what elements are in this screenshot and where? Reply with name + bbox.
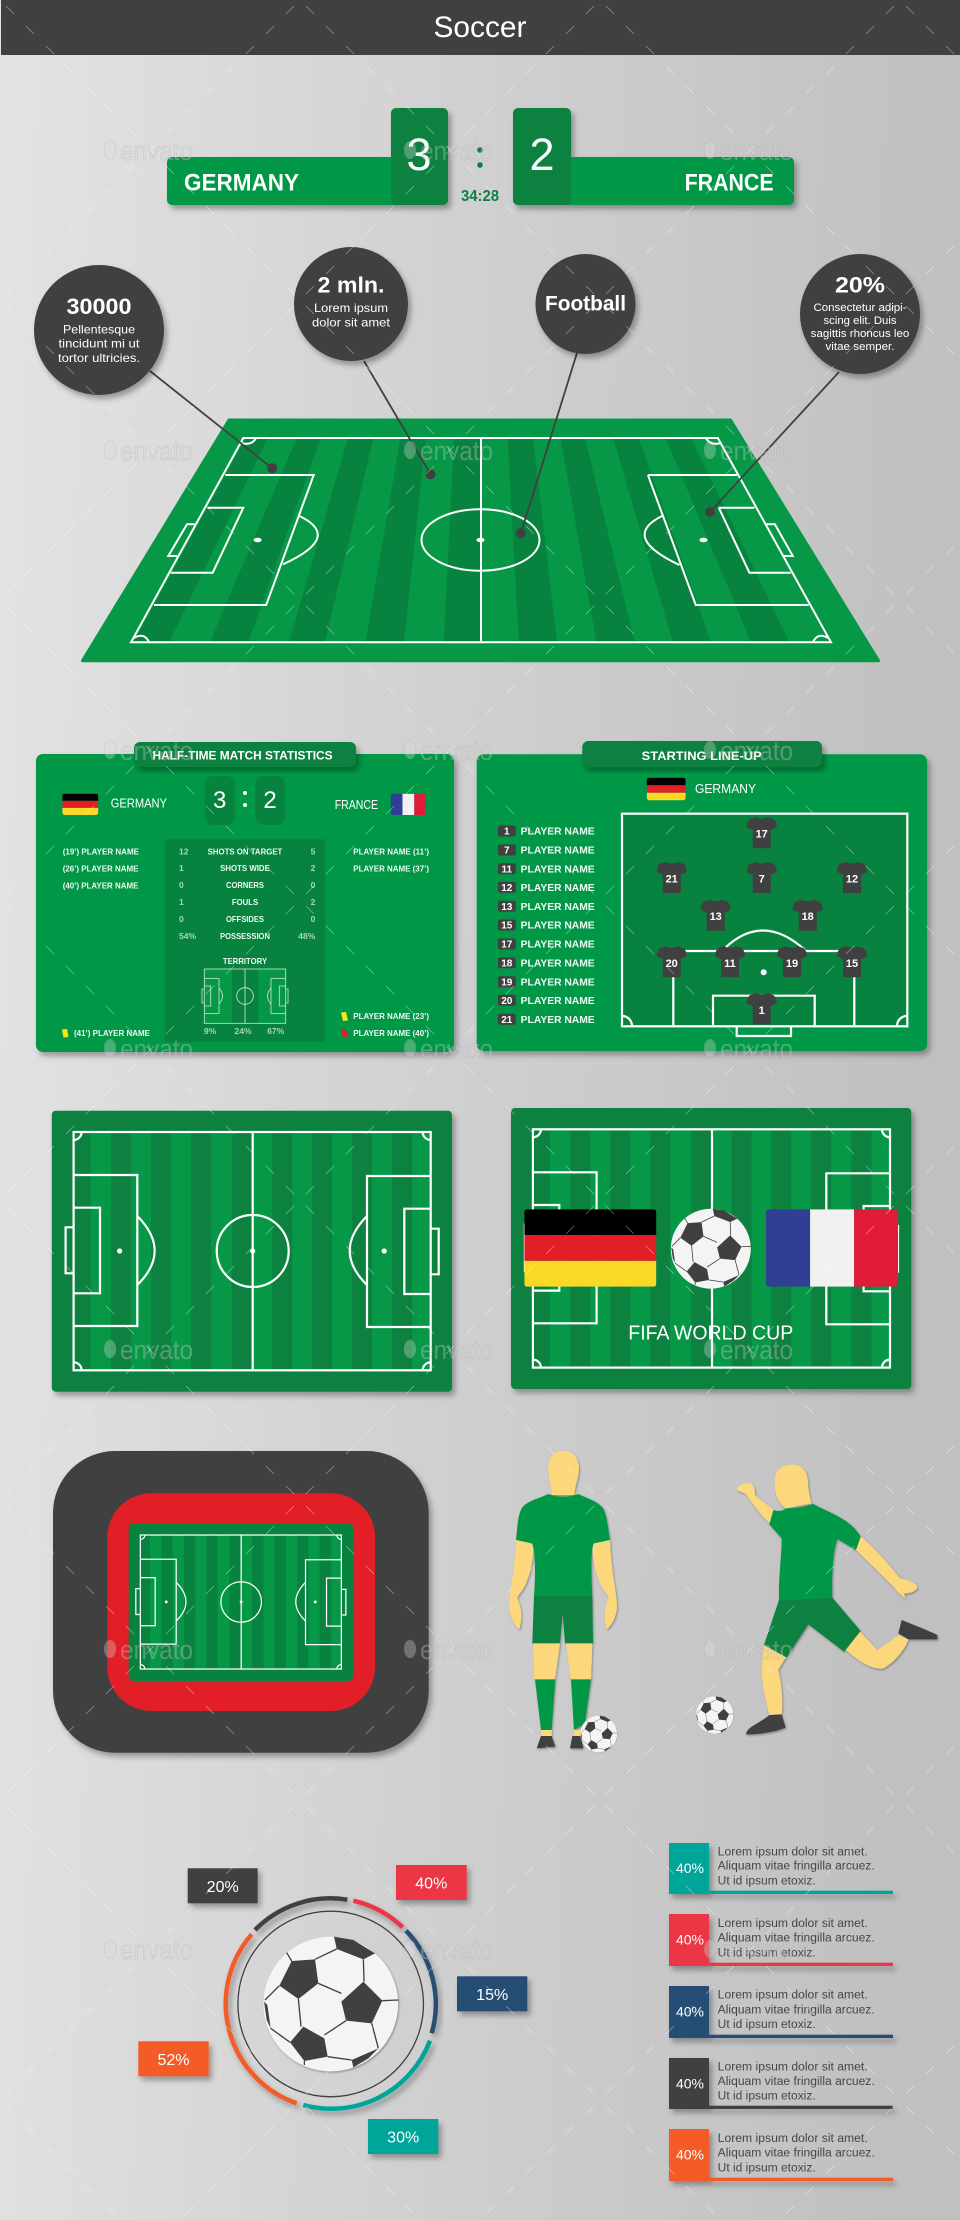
watermarks: envato: [420, 1935, 493, 1965]
watermarks: envato: [720, 1034, 793, 1064]
ring segment: orange: [226, 1934, 297, 2103]
France goal scorers: PLAYER NAME (11’): [353, 846, 429, 856]
yellow card: France: [341, 1012, 348, 1021]
ring segment: blue: [406, 1931, 436, 2033]
player list: PLAYER NAME: [521, 902, 595, 913]
list row: teal: [669, 1843, 893, 1894]
list row: dark: 40%: [676, 2075, 704, 2091]
player list: 12: [501, 883, 513, 894]
statistics table: 1: [179, 897, 184, 907]
red card: France: [341, 1029, 348, 1038]
panel tab: [134, 742, 356, 767]
list row: red: 40%: [676, 1931, 704, 1947]
score colon: [477, 147, 483, 168]
player list: PLAYER NAME: [521, 996, 595, 1007]
list row: dark: Ut id ipsum etoxiz.: [718, 2091, 816, 2103]
territory percentages: 24%: [234, 1026, 252, 1036]
football: [263, 1937, 398, 2071]
panel heading: HALF-TIME MATCH STATISTICS: [152, 748, 332, 762]
player shirts: 15: [846, 958, 858, 970]
panel: starting line-up: [477, 741, 927, 1051]
list row: orange: Lorem ipsum dolor sit amet.: [718, 2133, 868, 2145]
panel: France score bar: [513, 108, 794, 205]
list row: blue: 40%: [676, 2003, 704, 2019]
watermarks: envato: [720, 1335, 793, 1365]
list row: orange: [669, 2129, 893, 2181]
list row: orange: 40%: [676, 2146, 704, 2162]
player list: PLAYER NAME: [521, 883, 595, 894]
callout: 30000: Pellentesque: [63, 322, 135, 336]
watermarks: envato: [120, 136, 193, 166]
watermarks: envato: [120, 1935, 193, 1965]
player list: PLAYER NAME: [521, 921, 595, 932]
callout: 30000: tincidunt mi ut: [58, 336, 140, 350]
label: 20%: [188, 1868, 258, 1903]
player shirts: 13: [710, 911, 722, 923]
callout: 20%: vitae semper.: [826, 341, 894, 353]
flag: France: [766, 1209, 898, 1287]
watermarks: envato: [720, 1935, 793, 1965]
panel: Germany score bar: [167, 108, 448, 205]
player list: PLAYER NAME: [521, 958, 595, 969]
statistics table: 0: [179, 914, 184, 924]
player shirts: [657, 817, 867, 1024]
flag: Germany: [62, 794, 98, 815]
football: [671, 1209, 751, 1289]
statistics table: 2: [311, 897, 316, 907]
statistics table: CORNERS: [226, 880, 264, 890]
caption: FIFA WORLD CUP: [628, 1322, 793, 1344]
list row: blue: Lorem ipsum dolor sit amet.: [718, 1990, 868, 2002]
callout: 2 mln.: dolor sit amet: [312, 316, 391, 330]
France goal scorers: PLAYER NAME (37’): [353, 863, 429, 873]
callout: 2 mln.: [294, 247, 408, 361]
header bar: [1, 0, 960, 55]
list row: dark: Lorem ipsum dolor sit amet.: [718, 2061, 868, 2073]
team label: Germany: GERMANY: [111, 796, 167, 810]
football at kicking player: [696, 1696, 733, 1734]
formation pitch: [622, 814, 907, 1036]
watermarks: envato: [120, 436, 193, 466]
running track: [107, 1493, 375, 1711]
statistics table: 5: [311, 846, 316, 856]
list row: dark: Aliquam vitae fringilla arcuez.: [718, 2076, 875, 2088]
player list: 11: [502, 864, 513, 875]
France goal scorers: [353, 846, 429, 873]
yellow card: Germany: [62, 1029, 68, 1038]
callout: 2 mln.: 2 mln.: [318, 272, 384, 298]
panel: FIFA World Cup pitch: [511, 1108, 911, 1389]
Germany goal scorers: (19’) PLAYER NAME: [63, 846, 139, 856]
player list: 15: [501, 921, 513, 932]
label: 30%: [368, 2119, 438, 2154]
statistics table: 1: [179, 863, 184, 873]
standing player: [509, 1451, 617, 1748]
player list: PLAYER NAME: [521, 977, 595, 988]
watermarks: envato: [120, 736, 193, 766]
player shirts: 12: [846, 874, 858, 886]
team name: Germany: GERMANY: [184, 170, 299, 196]
label: 30%: 30%: [387, 2130, 419, 2146]
player shirts: 20: [666, 958, 678, 970]
player shirts: 18: [802, 911, 814, 923]
list row: teal: Lorem ipsum dolor sit amet.: [718, 1846, 868, 1858]
statistics table: 0: [179, 880, 184, 890]
watermarks: [104, 136, 793, 1965]
label: 52%: [138, 2041, 209, 2076]
statistics table: [165, 839, 325, 1042]
stadium icon: [53, 1451, 429, 1753]
list row: dark: [669, 2058, 893, 2109]
player shirts: 1: [759, 1005, 765, 1017]
thin inner ring: [238, 1911, 424, 2097]
team label: France: FRANCE: [335, 797, 378, 812]
callout leader lines: [150, 353, 839, 538]
team label: GERMANY: [695, 781, 756, 796]
statistics table: 48%: [298, 931, 316, 941]
player shirts: 17: [756, 828, 768, 840]
list row: teal: Ut id ipsum etoxiz.: [718, 1875, 816, 1887]
watermarks: envato: [120, 1034, 193, 1064]
panel: half time match statistics: [36, 742, 454, 1052]
perspective football field: [82, 420, 878, 661]
list row: red: Ut id ipsum etoxiz.: [718, 1947, 816, 1959]
label: 15%: [457, 1976, 527, 2011]
score: 2: 2: [529, 129, 555, 180]
callout: 30000: 30000: [66, 294, 132, 319]
ring segment: dark: [255, 1898, 347, 1930]
statistics table: SHOTS WIDE: [220, 863, 270, 873]
statistics table: 0: [311, 880, 316, 890]
title: Soccer: [434, 11, 527, 44]
player list: 18: [501, 958, 513, 969]
watermarks: envato: [420, 1034, 493, 1064]
watermarks: envato: [720, 136, 793, 166]
callout: Football: Football: [545, 292, 626, 316]
score tiles: 3: [213, 787, 226, 814]
player list: [498, 826, 595, 1026]
territory mini pitch: [202, 969, 288, 1023]
list row: orange: Aliquam vitae fringilla arcuez.: [718, 2148, 875, 2160]
callout: Football: [536, 254, 636, 354]
watermarks: envato: [720, 736, 793, 766]
player list: 13: [501, 902, 513, 913]
statistics table: FOULS: [232, 897, 258, 907]
label: 40%: 40%: [415, 1876, 447, 1892]
Germany goal scorers: (26’) PLAYER NAME: [63, 863, 139, 873]
player list: 7: [504, 846, 510, 857]
statistics table: 54%: [179, 931, 196, 941]
list row: teal: Aliquam vitae fringilla arcuez.: [718, 1861, 875, 1873]
statistics table: SHOTS ON TARGET: [208, 846, 283, 856]
label: 15%: 15%: [476, 1987, 508, 2004]
list row: orange: Ut id ipsum etoxiz.: [718, 2162, 816, 2174]
football at standing player: [580, 1716, 617, 1752]
panel: empty pitch: [52, 1111, 452, 1392]
label: 52%: 52%: [157, 2052, 190, 2069]
callout: 20%: Consectetur adipi-: [814, 302, 907, 314]
list row: teal: 40%: [676, 1860, 704, 1876]
callout: 20%: 20%: [835, 272, 885, 298]
flag: Germany: [647, 778, 686, 800]
panel tab: [582, 741, 822, 767]
watermarks: envato: [420, 1335, 493, 1365]
watermarks: envato: [420, 1635, 493, 1665]
callout: 20%: sagittis rhoncus leo: [811, 328, 909, 340]
player list: 17: [501, 940, 513, 951]
statistics table: 0: [311, 914, 316, 924]
list row: blue: Aliquam vitae fringilla arcuez.: [718, 2004, 875, 2016]
watermarks: envato: [420, 136, 493, 166]
kicking player: [737, 1465, 937, 1734]
player shirts: 11: [724, 958, 736, 970]
Germany goal scorers: [63, 846, 139, 890]
callout: 20%: [800, 254, 920, 374]
statistics table: OFFSIDES: [226, 914, 264, 924]
list row: blue: Ut id ipsum etoxiz.: [718, 2019, 816, 2031]
watermarks: envato: [120, 1635, 193, 1665]
score tiles: 2: [263, 787, 277, 814]
booked player: France red: PLAYER NAME (40’): [353, 1028, 429, 1038]
watermarks: envato: [120, 1335, 193, 1365]
ring segment: red: [353, 1901, 403, 1927]
player list: PLAYER NAME: [521, 846, 595, 857]
player list: PLAYER NAME: [521, 864, 595, 875]
ring segment: teal: [303, 2041, 430, 2109]
player list: 1: [504, 827, 510, 838]
callout: 30000: tortor ultricies.: [58, 351, 140, 365]
score: 3: 3: [406, 129, 432, 180]
player list: PLAYER NAME: [521, 827, 595, 838]
player list: 21: [501, 1015, 513, 1026]
watermarks: envato: [720, 1635, 793, 1665]
list row: blue: [669, 1986, 893, 2038]
list row: red: [669, 1914, 893, 1966]
watermarks: envato: [720, 436, 793, 466]
statistics table: POSSESSION: [220, 931, 270, 941]
statistics table: 12: [179, 846, 189, 856]
callout: 30000: [34, 265, 164, 395]
player shirts: 7: [759, 874, 765, 886]
stadium pitch: [129, 1523, 353, 1681]
player list: 20: [501, 996, 513, 1007]
statistics table: 2: [311, 863, 316, 873]
flag: Germany: [524, 1209, 656, 1287]
flag: France: [391, 794, 426, 815]
Germany goal scorers: (40’) PLAYER NAME: [63, 880, 139, 890]
scoreboard: [167, 108, 794, 205]
callout: 20%: scing elit. Duis: [824, 315, 897, 327]
player list: 19: [501, 977, 513, 988]
booked player: Germany: (41’) PLAYER NAME: [74, 1028, 150, 1038]
watermarks: envato: [420, 436, 493, 466]
territory percentages: [204, 1026, 285, 1036]
territory percentages: 67%: [267, 1026, 285, 1036]
list row: red: Aliquam vitae fringilla arcuez.: [718, 1933, 875, 1945]
score tiles: [205, 776, 285, 825]
list row: red: Lorem ipsum dolor sit amet.: [718, 1918, 868, 1930]
match time: 34:28: [461, 188, 499, 205]
player list: PLAYER NAME: [521, 1015, 595, 1026]
booked player: France yellow: PLAYER NAME (23’): [353, 1011, 429, 1021]
label: 20%: 20%: [207, 1879, 239, 1896]
donut chart with football: [138, 1865, 527, 2154]
team name: France: FRANCE: [685, 170, 774, 196]
label: 40%: [396, 1865, 467, 1900]
player shirts: 21: [666, 874, 678, 886]
callout: 2 mln.: Lorem ipsum: [314, 301, 388, 315]
player shirts: 19: [786, 958, 798, 970]
player list: PLAYER NAME: [521, 940, 595, 951]
statistics table: TERRITORY: [223, 956, 267, 966]
territory percentages: 9%: [204, 1026, 217, 1036]
panel heading: STARTING LINE-UP: [642, 749, 762, 763]
watermarks: envato: [420, 736, 493, 766]
